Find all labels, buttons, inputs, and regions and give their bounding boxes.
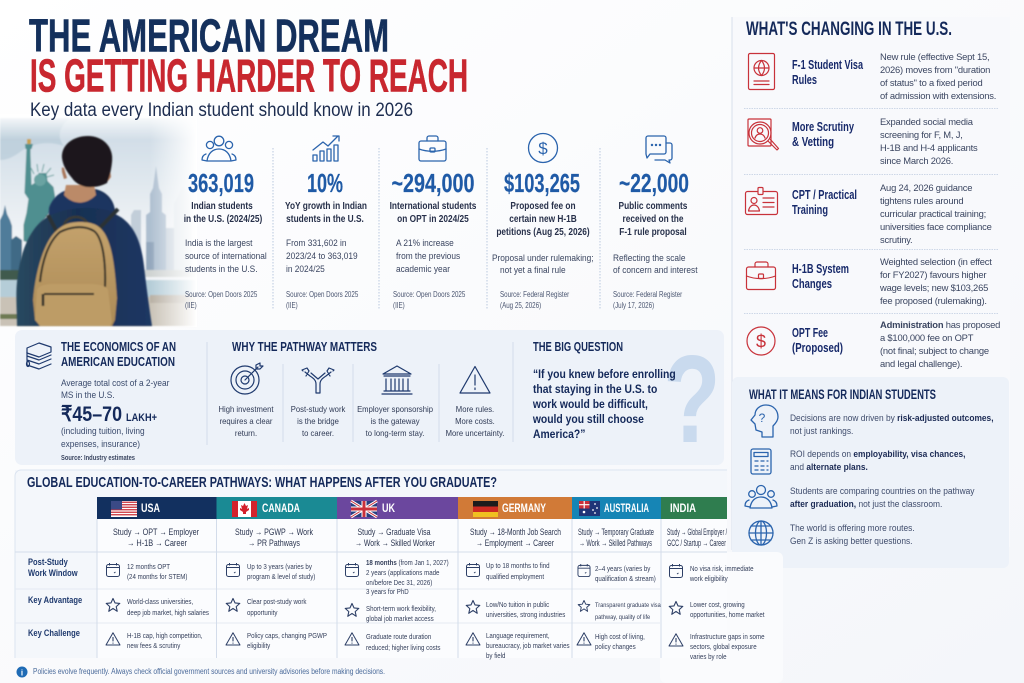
economics text: (including tuition, living: [61, 425, 145, 436]
statistic: H-1B fee: Proposed fee on: [510, 200, 576, 211]
statistic: Indian students: source of international: [185, 250, 267, 261]
row: H-1B system: wage levels; new $103,265: [879, 282, 988, 293]
column: USA cells: deep job market, high salaries: [127, 610, 210, 617]
statistic: public comments: [613, 136, 698, 310]
heading: WHAT IT MEANS FOR INDIAN STUDENTS: [749, 387, 936, 402]
row: H-1B system: Weighted selection (in effect: [880, 256, 992, 267]
statistic: Indian students: Indian students: [191, 200, 253, 211]
statistic: OPT students: A 21% increase: [396, 237, 454, 248]
statistic: YoY growth: students in the U.S.: [286, 213, 364, 224]
row: CPT: scrutiny.: [880, 234, 912, 245]
panel: economics, pathway, big question: [15, 330, 724, 469]
statistic: OPT students: from the previous: [396, 250, 461, 261]
icon: briefcase: [419, 136, 446, 161]
icon: calculator: [751, 449, 771, 474]
icon: briefcase: [746, 262, 776, 290]
column: Australia cells: High cost of living,: [595, 634, 645, 641]
column: UK cells: [345, 527, 449, 652]
column: USA cells: (24 months for STEM): [127, 574, 187, 581]
column: India cells: sectors, global exposure: [690, 644, 757, 651]
big question quote: that staying in the U.S. to: [533, 383, 657, 396]
icon: ID badge: [746, 188, 778, 214]
column: India cells: [667, 527, 765, 661]
column: Canada cells: Up to 3 years (varies by: [247, 564, 312, 571]
icon: dollar circle: [528, 134, 558, 162]
statistic: YoY growth: in 2024/25: [286, 263, 325, 274]
statistic: OPT students: (IIE): [393, 302, 405, 310]
row: CPT: tightens rules around: [880, 195, 963, 206]
economics text: MS in the U.S.: [61, 389, 115, 400]
row: H-1B system: Changes: [792, 277, 832, 291]
row: scrutiny: More Scrutiny: [792, 120, 854, 134]
column: UK cells: 18 months (from Jan 1, 2027): [366, 560, 449, 567]
statistic: public comments: F-1 rule proposal: [619, 226, 687, 237]
icon: dollar: $: [756, 332, 766, 352]
panel: what it means for Indian students: Students are comparing countries on the pathway: [790, 486, 975, 496]
panel: global education-to-career pathways table: [15, 470, 765, 661]
row: F-1 visa: Rules: [792, 73, 817, 87]
column header: India: INDIA: [670, 503, 696, 515]
panel: what it means for Indian students: not just rankings.: [790, 426, 853, 436]
item: employer sponsorship: is the gateway: [371, 417, 420, 426]
column header: USA: USA: [141, 503, 160, 515]
panel: what it means for Indian students: The world is offering more routes.: [790, 523, 915, 533]
item: more rules: More rules.: [456, 405, 494, 414]
column: USA cells: [106, 527, 210, 650]
big question quote: America?”: [533, 428, 585, 441]
column: Australia cells: 2–4 years (varies by: [595, 566, 651, 573]
column: UK cells: on/before Dec 31, 2026): [366, 580, 432, 587]
row labels: [28, 556, 82, 638]
economics text: expenses, insurance): [61, 438, 140, 449]
statistic: YoY growth: YoY growth in Indian: [285, 200, 367, 211]
panel: what it means for Indian students: ROI depends on employability, visa chances,: [790, 449, 965, 459]
column: UK cells: global job market access: [366, 616, 434, 623]
row: CPT: Aug 24, 2026 guidance: [880, 182, 972, 193]
statistic: H-1B fee: [492, 134, 594, 310]
column: Australia cells: Transparent graduate visa: [595, 602, 661, 609]
item: employer sponsorship: to long-term stay.: [366, 429, 424, 438]
item: high investment: return.: [235, 429, 257, 438]
row: F-1 visa: [748, 51, 996, 101]
column: Canada cells: Clear post-study work: [247, 599, 307, 606]
row: F-1 visa: of status" to a fixed period: [880, 77, 982, 88]
statistic: public comments: ~22,000: [619, 168, 689, 198]
column header: Australia: AUSTRALIA: [604, 503, 649, 515]
column: USA cells: World-class universities,: [127, 599, 193, 606]
statistic: OPT students: International students: [390, 200, 476, 211]
title: [29, 10, 468, 102]
economics heading: THE ECONOMICS OF AN: [61, 340, 176, 354]
statistic: H-1B fee: petitions (Aug 25, 2026): [496, 226, 590, 237]
table title: GLOBAL EDUCATION-TO-CAREER PATHWAYS: WHAT HAPPENS AFTER YOU GRADUATE?: [27, 474, 497, 491]
column: Germany cells: Low/No tuition in public: [486, 602, 550, 609]
column: Australia cells: qualification & stream): [595, 576, 656, 583]
column: UK cells: reduced; higher living costs: [366, 645, 441, 652]
column header: UK: [337, 497, 458, 519]
statistic: public comments: Source: Federal Register: [613, 291, 683, 299]
statistic: Indian students: Source: Open Doors 2025: [185, 291, 257, 299]
statistic: YoY growth: From 331,602 in: [286, 237, 347, 248]
icon: head with question mark: [751, 405, 778, 437]
footer note: [16, 666, 385, 678]
row: scrutiny: [748, 116, 978, 166]
row: OPT fee: OPT Fee: [792, 326, 828, 340]
icon: passport: [748, 54, 774, 90]
statistic: H-1B fee: Proposal under rulemaking;: [492, 252, 594, 263]
row: F-1 visa: New rule (effective Sept 15,: [880, 51, 989, 62]
statistic: public comments: received on the: [622, 213, 684, 224]
column: Canada cells: Policy caps, changing PGWP: [247, 633, 327, 640]
column: Canada cells: opportunity: [247, 610, 278, 617]
column: Australia cells: pathway, quality of life: [595, 614, 651, 621]
icon: head with question mark: ?: [759, 411, 766, 425]
item: employer sponsorship: Employer sponsorship: [357, 405, 433, 414]
statistic: Indian students: [184, 136, 267, 310]
item: post-study work: to career.: [302, 429, 334, 438]
statistic: OPT students: academic year: [396, 263, 450, 274]
economics text: [61, 377, 169, 462]
column: Canada cells: program & level of study): [247, 574, 315, 581]
card behind India column: [660, 552, 783, 683]
statistic: YoY growth: Source: Open Doors 2025: [286, 291, 358, 299]
big question heading: THE BIG QUESTION: [533, 340, 623, 354]
statistic: H-1B fee: not yet a final rule: [500, 264, 566, 275]
panel: what it means for Indian students: after graduation, not just the classroom.: [790, 499, 942, 509]
statistic: public comments: Public comments: [619, 200, 687, 211]
statistic: Indian students: students in the U.S.: [185, 263, 258, 274]
item: more rules: [446, 366, 504, 438]
hero photo: student facing New York skyline: [0, 114, 197, 327]
item: post-study work: Post-study work: [291, 405, 346, 414]
icon: dollar circle: $: [538, 139, 548, 158]
item: post-study work: is the bridge: [297, 417, 339, 426]
column: Australia cells: policy changes: [595, 644, 636, 651]
column: Germany cells: by field: [486, 653, 506, 660]
column: India cells: Study → Global Employer /: [667, 527, 727, 537]
panel: what it means for Indian students: [732, 377, 1009, 568]
panel: what it means for Indian students: Gen Z is asking better questions.: [790, 536, 913, 546]
column: USA cells: new fees & scrutiny: [127, 643, 181, 650]
column: Germany cells: Language requirement,: [486, 633, 550, 640]
statistic: Indian students: in the U.S. (2024/25): [184, 213, 262, 224]
column: UK cells: 3 years for PhD: [366, 589, 409, 596]
big question quote: “If you knew before enrolling: [533, 368, 676, 381]
column header: Canada: [216, 497, 337, 519]
column: Germany cells: → Employment → Career: [476, 538, 554, 548]
panel: what it means for Indian students: Decisions are now driven by risk-adjusted outcomes,: [790, 413, 994, 423]
row labels: Post-Study: [28, 556, 68, 567]
row: scrutiny: & Vetting: [792, 135, 834, 149]
statistic: Indian students: India is the largest: [185, 237, 253, 248]
column: India cells: GCC / Startup → Career: [667, 538, 726, 548]
row: F-1 visa: F-1 Student Visa: [792, 58, 864, 72]
statistic: YoY growth: (IIE): [286, 302, 298, 310]
column: USA cells: → H-1B → Career: [127, 538, 187, 548]
column: USA cells: 12 months OPT: [127, 564, 170, 571]
statistic: H-1B fee: certain new H-1B: [509, 213, 577, 224]
icon: globe: [749, 521, 773, 545]
statistic: Indian students: (IIE): [185, 302, 197, 310]
panel: what it means for Indian students: and alternate plans.: [790, 462, 868, 472]
column header: Germany: [458, 497, 572, 519]
economics text: Source: Industry estimates: [61, 453, 135, 462]
row: OPT fee: (Proposed): [792, 341, 843, 355]
column header: Canada: CANADA: [262, 503, 300, 515]
column: Germany cells: [466, 527, 570, 660]
row: F-1 visa: of admission with extensions.: [880, 90, 996, 101]
item: post-study work: [291, 368, 346, 438]
item: employer sponsorship: [357, 366, 433, 438]
statistic: YoY growth: 2023/24 to 363,019: [286, 250, 358, 261]
item: high investment: [219, 363, 274, 438]
big question mark watermark: ?: [664, 331, 720, 469]
item: more rules: More costs.: [455, 417, 495, 426]
statistic: H-1B fee: (Aug 25, 2026): [500, 302, 541, 310]
panel: what's changing in the U.S.: [732, 17, 1010, 550]
big question quote: [532, 368, 676, 441]
row: scrutiny: H-1B and H-4 applicants: [880, 142, 978, 153]
statistic: Indian students: 363,019: [188, 168, 254, 198]
icon: stack of books: [26, 343, 51, 369]
row: scrutiny: Expanded social media: [880, 116, 974, 127]
row: H-1B system: [746, 256, 992, 306]
column: India cells: opportunities, home market: [690, 612, 765, 619]
column: Canada cells: eligibility: [247, 643, 271, 650]
row: CPT: curricular practical training;: [880, 208, 986, 219]
row: CPT: Training: [792, 203, 828, 217]
pathway heading: WHY THE PATHWAY MATTERS: [232, 340, 377, 354]
column: India cells: varies by role: [690, 654, 727, 661]
column header: UK: UK: [382, 503, 396, 515]
column: UK cells: → Work → Skilled Worker: [355, 538, 435, 548]
title: THE AMERICAN DREAM: [29, 10, 389, 62]
big question quote: would you still choose: [532, 413, 644, 426]
icon: info: [16, 666, 28, 678]
economics text: LAKH+: [126, 412, 157, 424]
column: Australia cells: → Work → Skilled Pathways: [579, 538, 652, 548]
column: India cells: Infrastructure gaps in some: [690, 634, 765, 641]
column: Germany cells: universities, strong industries: [486, 612, 566, 619]
big question quote: work would be difficult,: [532, 398, 648, 411]
row: H-1B system: for FY2027) favours higher: [880, 269, 986, 280]
statistic: OPT students: on OPT in 2024/25: [397, 213, 469, 224]
column: Australia cells: Study → Temporary Graduate: [578, 527, 654, 537]
item: more rules: More uncertainty.: [446, 429, 504, 438]
statistic: YoY growth: [285, 136, 367, 310]
row: CPT: [746, 182, 992, 245]
panel: economics, pathway, big question: AMERICAN EDUCATION: [61, 355, 175, 369]
row labels: Key Advantage: [28, 594, 82, 605]
column header: Australia: [572, 497, 661, 519]
icon: growth chart: [313, 136, 339, 161]
economics text: ₹45–70: [61, 402, 122, 426]
column: India cells: work eligibility: [689, 576, 728, 583]
row: scrutiny: since March 2026.: [880, 155, 953, 166]
row: OPT fee: and legal challenge).: [880, 358, 962, 369]
row: OPT fee: a $100,000 fee on OPT: [880, 332, 974, 343]
column: Australia cells: [577, 527, 661, 651]
icon: info: i: [21, 668, 23, 678]
column header: USA: [97, 497, 216, 519]
row: OPT fee: (not final; subject to change: [880, 345, 989, 356]
row: OPT fee: [747, 319, 1000, 369]
statistic: H-1B fee: $103,265: [504, 168, 580, 198]
column: Canada cells: → PR Pathways: [248, 538, 300, 548]
row: H-1B system: H-1B System: [792, 262, 849, 276]
column: UK cells: 2 years (applications made: [366, 570, 440, 577]
column: Germany cells: Up to 18 months to find: [486, 563, 550, 570]
column: Canada cells: [226, 527, 327, 650]
statistic: public comments: (July 17, 2026): [613, 302, 654, 310]
row: CPT: CPT / Practical: [792, 188, 857, 202]
column: USA cells: Study → OPT → Employer: [113, 527, 199, 537]
icon: people: [745, 486, 777, 508]
row: H-1B system: fee proposed (rulemaking).: [880, 295, 987, 306]
icon: chat bubbles: [646, 136, 672, 163]
column: UK cells: Short-term work flexibility,: [366, 606, 436, 613]
icon: dollar: [747, 327, 775, 355]
subtitle: Key data every Indian student should know in 2026: [30, 100, 413, 121]
row labels: Key Challenge: [28, 627, 80, 638]
row: OPT fee: Administration has proposed: [880, 319, 1000, 330]
statistic: public comments: of concern and interest: [613, 264, 698, 275]
row: F-1 visa: 2026) moves from "duration: [880, 64, 990, 75]
column: Germany cells: qualified employment: [486, 574, 544, 581]
statistic: OPT students: ~294,000: [392, 168, 474, 198]
statistic: public comments: Reflecting the scale: [613, 252, 686, 263]
economics text: Average total cost of a 2-year: [61, 377, 169, 388]
column: Germany cells: Study → 18-Month Job Search: [470, 527, 561, 537]
column: India cells: No visa risk, immediate: [690, 566, 754, 573]
column: India cells: Lower cost, growing: [690, 602, 745, 609]
column: UK cells: Graduate route duration: [366, 634, 431, 641]
column: Germany cells: bureaucracy, job market varies: [486, 643, 570, 650]
row: CPT: universities face compliance: [880, 221, 992, 232]
item: high investment: requires a clear: [220, 417, 273, 426]
statistic: YoY growth: 10%: [307, 168, 343, 198]
statistic: OPT students: Source: Open Doors 2025: [393, 291, 465, 299]
icon: magnifier over profile: [748, 119, 778, 150]
statue of liberty: [24, 144, 56, 243]
column: Canada cells: Study → PGWP → Work: [235, 527, 313, 537]
item: high investment: High investment: [219, 405, 274, 414]
statistic: OPT students: [390, 136, 476, 310]
column header: India: [661, 497, 727, 519]
icon: people: [202, 136, 236, 161]
statistic: H-1B fee: Source: Federal Register: [500, 291, 570, 299]
column: UK cells: Study → Graduate Visa: [358, 527, 431, 537]
column header: Germany: GERMANY: [502, 503, 546, 515]
column: USA cells: H-1B cap, high competition,: [127, 633, 203, 640]
footer note: Policies evolve frequently. Always check official government sources and university advisories before making decisions.: [33, 667, 385, 676]
row: scrutiny: screening for F, M, J,: [880, 129, 963, 140]
title: IS GETTING HARDER TO REACH: [30, 50, 468, 102]
row labels: Work Window: [28, 567, 78, 578]
